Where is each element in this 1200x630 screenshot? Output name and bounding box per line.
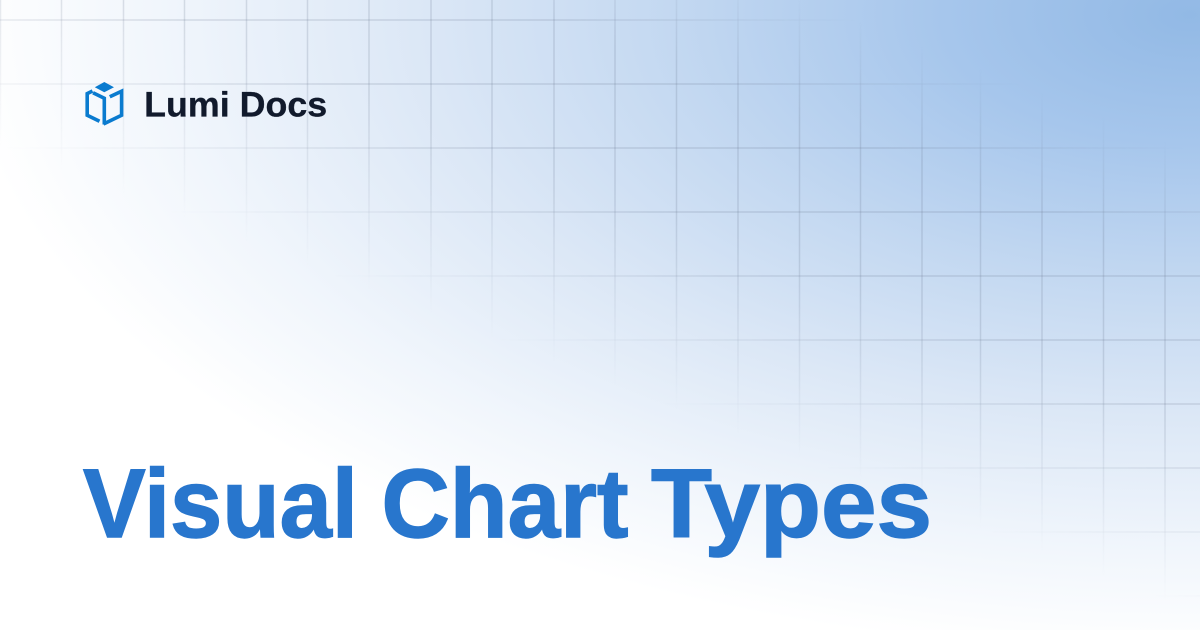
icon: Lumi Docs cube logo [85,82,124,126]
title: Types [651,449,932,558]
brand name: Lumi Docs [144,85,327,125]
title: Visual [83,449,358,558]
title: Chart [382,449,628,558]
